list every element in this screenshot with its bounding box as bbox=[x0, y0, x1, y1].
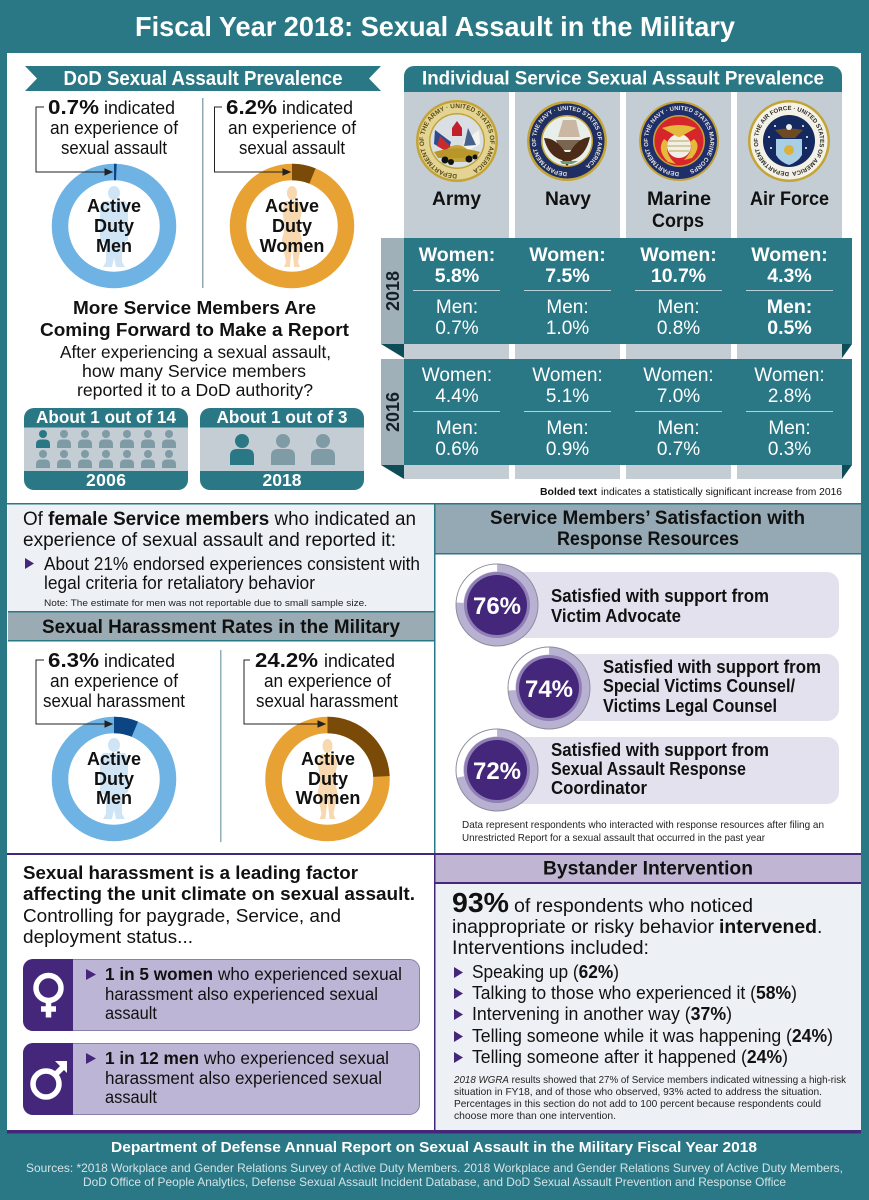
panel: satisfaction results bbox=[454, 564, 839, 844]
note: WGRA: Percentages in this section do not add to 100 percent because respondents could bbox=[454, 1098, 821, 1110]
item: SARC 72%: Satisfied with support from bbox=[551, 740, 769, 760]
marine corps 2016: Men: bbox=[657, 418, 700, 439]
icon: people row bbox=[36, 430, 176, 468]
band: 2018 results bbox=[381, 238, 852, 358]
air force 2016 bbox=[754, 365, 825, 460]
heading: bystander intervention bbox=[435, 854, 861, 884]
navy 2018: Men: bbox=[546, 297, 589, 318]
navy 2016 bbox=[532, 365, 603, 460]
note: data respondents: Data represent respondents who interacted with response resources after filing an bbox=[462, 819, 824, 831]
note: WGRA: situation in FY18, and of those who observed, 93% acted to address the situation. bbox=[454, 1086, 822, 1098]
donut: active duty women 6.2%: Women bbox=[260, 236, 324, 256]
footer: Department of Defense Annual Report on Sexual Assault in the Military Fiscal Year 2018 bbox=[111, 1139, 757, 1156]
item: SARC 72%: Coordinator bbox=[551, 778, 647, 798]
marine corps 2016: 0.7% bbox=[657, 439, 700, 460]
text block: reporting question bbox=[60, 342, 331, 400]
heading: bystander intervention: Bystander Intervention bbox=[543, 858, 753, 880]
callout: 1 in 5 women: 1 in 5 women bbox=[105, 964, 213, 984]
panel: retaliation among female members: legal criteria for retaliatory behavior bbox=[44, 573, 315, 593]
callout: men 0.7%: an experience of bbox=[50, 118, 179, 138]
air force 2018: Men: bbox=[767, 296, 812, 318]
donut: active duty men 0.7%: Men bbox=[96, 236, 132, 256]
service names: Marine bbox=[647, 189, 711, 210]
service names: Corps bbox=[652, 211, 704, 232]
callout: women 24.2%: 24.2% bbox=[255, 650, 318, 672]
icon: male symbol bbox=[33, 1065, 65, 1097]
marine corps 2018: 10.7% bbox=[651, 265, 706, 287]
item: SARC 72%: 72% bbox=[473, 758, 521, 785]
item: SARC 72% bbox=[454, 727, 839, 813]
text block: 93% intervened: 93% bbox=[452, 887, 509, 918]
panel: 2018 reporting, about 1 out of 3: About 1 out of 3 bbox=[216, 407, 348, 427]
divider bbox=[220, 650, 222, 842]
item: victim advocate 76% bbox=[456, 564, 839, 646]
panel: retaliation among female members: Note: The estimate for men was not reportable due to small sample size. bbox=[44, 598, 367, 609]
panel: bystander intervention bbox=[435, 854, 861, 1130]
service names: Army bbox=[432, 189, 481, 210]
seal: Army: DEPARTMENT OF THE ARMY · UNITED STATES OF AMERICA bbox=[419, 104, 495, 178]
divider bbox=[202, 98, 204, 288]
icon: female symbol bbox=[36, 976, 61, 1018]
army 2018: 0.7% bbox=[435, 318, 479, 339]
army 2016: 4.4% bbox=[435, 386, 479, 407]
legend note: Bolded text bbox=[540, 487, 598, 498]
air force 2018: 0.5% bbox=[767, 317, 812, 339]
army 2016: Women: bbox=[422, 365, 492, 386]
title: Fiscal Year 2018: Sexual Assault in the Military bbox=[135, 11, 735, 42]
band: 2016 results bbox=[381, 359, 852, 479]
callout: women 24.2%: an experience of bbox=[264, 671, 392, 691]
icon: bullet bbox=[25, 558, 34, 569]
air force 2016: Women: bbox=[754, 365, 825, 386]
text block: 93% intervened: inappropriate or risky behavior bbox=[452, 916, 714, 938]
marine corps 2016: Women: bbox=[643, 365, 714, 386]
icon: three people bbox=[230, 434, 335, 465]
footer: DoD Office of People Analytics, Defense Sexual Assault Incident Database, and DoD Sexual Assault Prevention and Response Office bbox=[83, 1175, 786, 1189]
note: data respondents: Unrestricted Report for a sexual assault that occurred in the past year bbox=[462, 832, 765, 844]
note: WGRA: 2018 WGRA results showed that 27% of Service members indicated witnessing a high-risk bbox=[453, 1074, 847, 1086]
air force 2018: Women: bbox=[751, 244, 828, 266]
donut: active duty men 6.3%: Active bbox=[87, 749, 141, 769]
text block: 93% intervened bbox=[452, 887, 822, 959]
heading: sexual harassment rates: Sexual Harassment Rates in the Military bbox=[42, 616, 400, 638]
text block: leading factor: Sexual harassment is a leading factor bbox=[23, 862, 358, 883]
callout: men 0.7% bbox=[48, 97, 179, 158]
donut: active duty men 0.7%: Duty bbox=[94, 216, 134, 236]
callout: women 6.2%: indicated bbox=[282, 98, 353, 118]
donut: active duty men 6.3% bbox=[60, 725, 168, 833]
donut: active duty women 24.2%: Active bbox=[301, 749, 355, 769]
callout: men 0.7%: 0.7% bbox=[48, 97, 99, 119]
text block: 93% intervened: intervened bbox=[719, 916, 817, 938]
list: interventions: Telling someone while it was happening (24%) bbox=[472, 1025, 833, 1046]
item: special victims counsel 74%: Victims Legal Counsel bbox=[603, 696, 777, 716]
heading: satisfaction with response resources: Response Resources bbox=[557, 528, 739, 550]
marine corps 2018: 0.8% bbox=[657, 318, 700, 339]
text block: leading factor: Controlling for paygrade, Service, and bbox=[23, 905, 341, 926]
navy 2016: 5.1% bbox=[546, 386, 589, 407]
item: SARC 72%: Sexual Assault Response bbox=[551, 759, 746, 779]
army 2018: 5.8% bbox=[435, 265, 479, 287]
service names bbox=[432, 189, 829, 232]
service names: Navy bbox=[545, 189, 591, 210]
note: data respondents bbox=[462, 819, 824, 844]
callout: men 0.7%: indicated bbox=[104, 98, 175, 118]
donut: active duty men 0.7% bbox=[60, 172, 168, 280]
note: WGRA: choose more than one intervention. bbox=[454, 1110, 616, 1122]
army 2018: Men: bbox=[436, 297, 478, 318]
callout: 1 in 12 men: harassment also experienced sexual bbox=[105, 1068, 382, 1088]
text block: reporting question: reported it to a DoD authority? bbox=[77, 380, 313, 400]
heading: satisfaction with response resources: Service Members’ Satisfaction with bbox=[490, 507, 805, 529]
marine corps 2016: 7.0% bbox=[657, 386, 700, 407]
item: victim advocate 76%: Satisfied with support from bbox=[551, 586, 769, 606]
text block: reporting question: how many Service members bbox=[82, 361, 306, 381]
donut: active duty women 6.2%: Duty bbox=[272, 216, 312, 236]
navy 2016: Women: bbox=[532, 365, 603, 386]
callout: men 6.3%: an experience of bbox=[50, 671, 179, 691]
list: interventions bbox=[454, 961, 833, 1067]
section rules bbox=[7, 503, 861, 1134]
panel: individual service prevalence bbox=[381, 66, 852, 498]
air force 2016: Men: bbox=[768, 418, 811, 439]
marine corps 2018: Women: bbox=[640, 244, 717, 266]
item: special victims counsel 74%: 74% bbox=[525, 676, 573, 703]
callout: men 6.3% bbox=[43, 650, 185, 711]
callout: 1 in 12 men: assault bbox=[105, 1087, 157, 1107]
item: special victims counsel 74%: Satisfied with support from bbox=[603, 657, 821, 677]
arrow: men callout to donut bbox=[36, 660, 112, 727]
marine corps 2018: Men: bbox=[657, 297, 700, 318]
navy 2018: Women: bbox=[529, 244, 606, 266]
panel: DoD sexual assault prevalence bbox=[25, 66, 381, 288]
panel: 2018 reporting, about 1 out of 3 bbox=[200, 407, 364, 490]
air force 2016: 2.8% bbox=[768, 386, 811, 407]
callout: men 6.3%: 6.3% bbox=[48, 650, 99, 672]
list: interventions: Talking to those who experienced it (58%) bbox=[472, 982, 797, 1003]
donut: active duty women 24.2% bbox=[274, 725, 382, 833]
callout: 1 in 5 women bbox=[23, 959, 420, 1031]
text block: 93% intervened: Interventions included: bbox=[452, 937, 649, 959]
air force 2016: 0.3% bbox=[768, 439, 811, 460]
panel: retaliation among female members: About 21% endorsed experiences consistent with bbox=[44, 554, 420, 574]
list: interventions: Intervening in another way (37%) bbox=[472, 1003, 732, 1024]
callout: women 6.2%: an experience of bbox=[228, 118, 357, 138]
donut: active duty men 0.7%: Active bbox=[87, 196, 141, 216]
arrow: men callout to donut bbox=[36, 107, 112, 175]
army 2018: Women: bbox=[419, 244, 495, 266]
callout: 1 in 5 women: assault bbox=[105, 1003, 157, 1023]
heading: sexual harassment rates bbox=[8, 612, 434, 641]
callout: 1 in 12 men bbox=[23, 1043, 420, 1115]
text block: leading factor bbox=[23, 862, 415, 947]
arrow: women callout to donut bbox=[244, 660, 325, 727]
year label 2016: 2016 bbox=[383, 392, 403, 432]
seal: Air Force: DEPARTMENT OF THE AIR FORCE · UNITED STATES OF AMERICA bbox=[754, 106, 824, 176]
panel: retaliation among female members: Of female Service members who indicated an bbox=[23, 508, 416, 530]
panel: 2018 reporting, about 1 out of 3: 2018 bbox=[262, 470, 302, 490]
callout: 1 in 12 men: who experienced sexual bbox=[203, 1048, 389, 1068]
callout: men 6.3%: sexual harassment bbox=[43, 691, 185, 711]
service names: Air Force bbox=[750, 189, 829, 210]
item: victim advocate 76%: Victim Advocate bbox=[551, 606, 681, 626]
panel: 2006 reporting, about 1 out of 14: 2006 bbox=[86, 470, 126, 490]
item: special victims counsel 74%: Special Victims Counsel/ bbox=[603, 676, 795, 696]
panel: harassment donuts bbox=[36, 650, 398, 842]
list: interventions: Speaking up (62%) bbox=[472, 961, 619, 982]
text block: leading factor: deployment status... bbox=[23, 926, 193, 947]
callout: 1 in 12 men: 1 in 12 men bbox=[105, 1048, 199, 1068]
text block: leading factor: affecting the unit climate on sexual assault. bbox=[23, 883, 415, 904]
marine corps 2018 bbox=[640, 244, 717, 339]
text block: 93% intervened: . bbox=[817, 916, 822, 938]
item: special victims counsel 74% bbox=[508, 647, 839, 729]
donut: active duty women 6.2%: Active bbox=[265, 196, 319, 216]
text block: reporting question: After experiencing a sexual assault, bbox=[60, 342, 331, 362]
panel: 2006 reporting, about 1 out of 14: About 1 out of 14 bbox=[36, 407, 176, 427]
panel heading: Individual Service Sexual Assault Prevalence bbox=[422, 68, 824, 90]
list: interventions: Telling someone after it happened (24%) bbox=[472, 1046, 788, 1067]
columns bbox=[404, 92, 842, 479]
item: victim advocate 76%: 76% bbox=[473, 593, 521, 620]
footer: Sources: *2018 Workplace and Gender Relations Survey of Active Duty Members. 2018 Workplace and Gender Relations Survey of Active Duty Members, bbox=[26, 1161, 843, 1175]
navy 2018: 7.5% bbox=[545, 265, 590, 287]
heading: coming forward bbox=[40, 297, 349, 340]
ribbon heading: DoD Sexual Assault Prevalence bbox=[64, 68, 342, 90]
callout: women 6.2%: sexual assault bbox=[239, 138, 345, 158]
heading: satisfaction with response resources bbox=[435, 504, 861, 554]
icon: male arrowhead bbox=[55, 1061, 67, 1073]
heading: coming forward: More Service Members Are bbox=[73, 297, 316, 318]
donut: active duty men 6.3%: Men bbox=[96, 788, 132, 808]
callout: women 6.2%: 6.2% bbox=[226, 97, 277, 119]
year label 2018: 2018 bbox=[383, 271, 403, 311]
panel: retaliation among female members bbox=[8, 504, 434, 612]
army 2016 bbox=[422, 365, 492, 460]
footer bbox=[26, 1139, 843, 1189]
panel: retaliation among female members: experience of sexual assault and reported it: bbox=[23, 529, 396, 551]
legend note: indicates a statistically significant increase from 2016 bbox=[601, 487, 842, 498]
arrow: women callout to donut bbox=[214, 107, 290, 175]
army 2016: Men: bbox=[436, 418, 478, 439]
callout: men 6.3%: indicated bbox=[104, 651, 175, 671]
army 2018 bbox=[419, 244, 495, 339]
callout: men 0.7%: sexual assault bbox=[61, 138, 167, 158]
callout: women 6.2% bbox=[226, 97, 357, 158]
donut: active duty women 6.2% bbox=[238, 172, 346, 280]
seal: Marine Corps: DEPARTMENT OF THE NAVY · UNITED STATES MARINE CORPS bbox=[644, 106, 714, 176]
heading: coming forward: Coming Forward to Make a Report bbox=[40, 319, 349, 340]
navy 2018: 1.0% bbox=[546, 318, 589, 339]
seal: Navy: DEPARTMENT OF THE NAVY · UNITED STATES OF AMERICA bbox=[532, 106, 602, 176]
marine corps 2016 bbox=[643, 365, 714, 460]
donut: active duty women 24.2%: Women bbox=[296, 788, 360, 808]
navy 2018 bbox=[529, 244, 606, 339]
air force 2018 bbox=[751, 244, 828, 339]
callout: 1 in 5 women: who experienced sexual bbox=[217, 964, 402, 984]
text block: 93% intervened: of respondents who noticed bbox=[514, 895, 753, 917]
donut: active duty women 24.2%: Duty bbox=[308, 769, 348, 789]
navy 2016: Men: bbox=[546, 418, 589, 439]
panel: sexual harassment as a leading factor bbox=[23, 862, 420, 1115]
callout: women 24.2%: indicated bbox=[324, 651, 395, 671]
callout: 1 in 5 women: harassment also experienced sexual bbox=[105, 984, 378, 1004]
air force 2018: 4.3% bbox=[767, 265, 812, 287]
callout: women 24.2% bbox=[255, 650, 398, 711]
callout: women 24.2%: sexual harassment bbox=[256, 691, 398, 711]
note: WGRA bbox=[453, 1074, 847, 1122]
donut: active duty men 6.3%: Duty bbox=[94, 769, 134, 789]
panel: 2006 reporting, about 1 out of 14 bbox=[24, 407, 188, 490]
navy 2016: 0.9% bbox=[546, 439, 589, 460]
army 2016: 0.6% bbox=[435, 439, 479, 460]
